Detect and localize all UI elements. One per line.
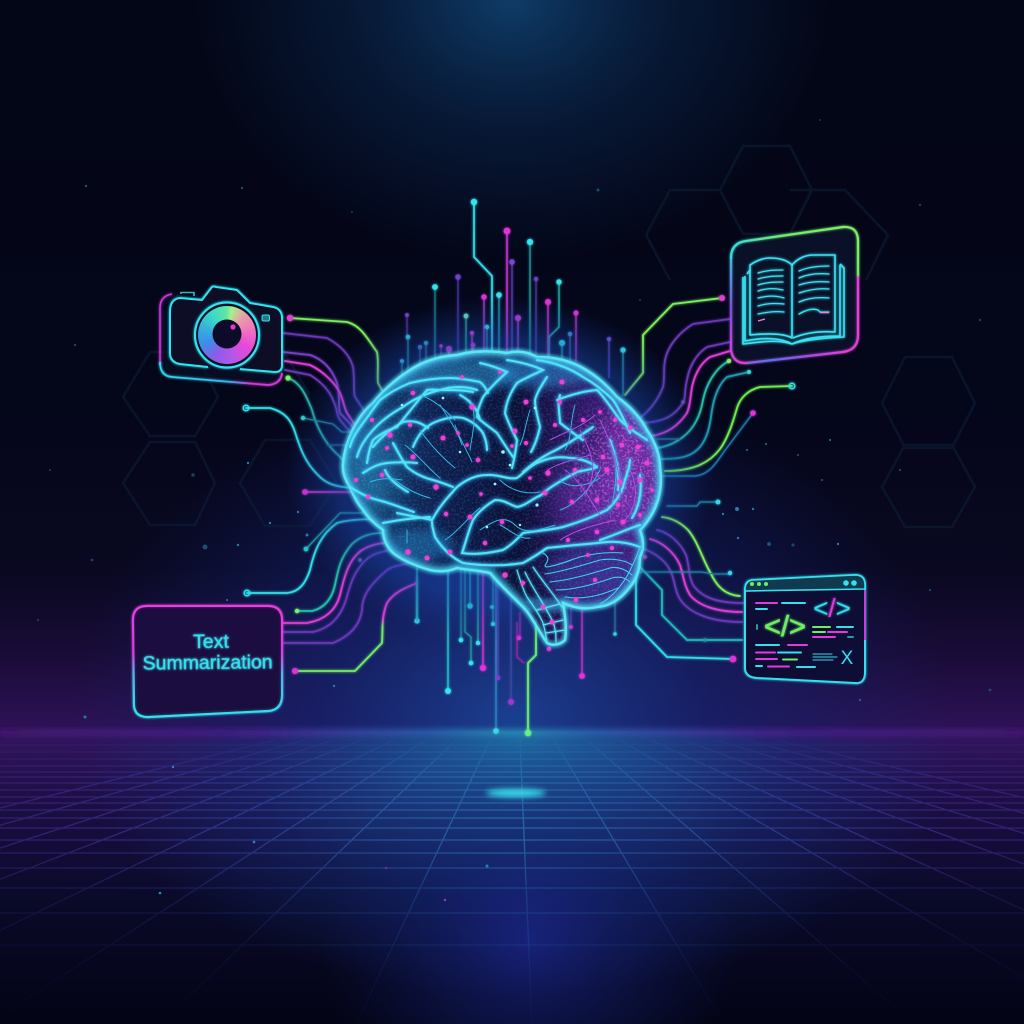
camera body outline xyxy=(170,286,282,372)
book page text lines xyxy=(758,266,829,314)
trace end nodes above the brain xyxy=(400,199,626,363)
trace end nodes below the brain xyxy=(414,603,617,736)
camera flash xyxy=(262,315,270,321)
brain halo xyxy=(285,295,715,645)
brain neuron dots xyxy=(354,370,654,624)
camera connection nodes xyxy=(243,315,308,495)
open book drawing xyxy=(743,255,844,344)
brain colour haze and speckle xyxy=(340,350,670,650)
code tag green: </> xyxy=(764,611,806,643)
book pink accent lines xyxy=(758,312,829,321)
central glowing brain xyxy=(285,295,715,650)
camera back shell xyxy=(160,294,282,386)
background star particles xyxy=(37,119,991,746)
background hexagon pattern xyxy=(123,146,975,527)
cerebellum folds xyxy=(543,547,640,604)
brain folds: fine cyan and purple traces xyxy=(370,395,635,543)
camera top button xyxy=(181,292,194,296)
brain outline xyxy=(343,351,661,645)
camera shell bottom edge xyxy=(160,362,282,385)
brain cyan sparks xyxy=(401,397,539,528)
book card borders xyxy=(731,227,858,363)
floor: perspective grid with horizon xyxy=(0,729,1024,1024)
card label: Summarization xyxy=(142,651,273,675)
window right accent xyxy=(864,590,866,640)
camera lens highlight xyxy=(230,324,236,330)
panel: camera icon xyxy=(160,286,282,386)
camera rainbow iris xyxy=(198,306,256,364)
code line bars xyxy=(756,603,853,667)
panel: text summarization xyxy=(133,606,282,717)
camera pupil xyxy=(212,320,242,348)
code close glyph: X xyxy=(841,648,854,669)
code tag cyan: </> xyxy=(813,593,851,623)
background: dark space gradient xyxy=(0,0,1024,731)
connections: book to brain xyxy=(625,298,792,476)
brain folds: soft blue wash under the gyri xyxy=(350,360,647,565)
connections: text summarization to brain xyxy=(247,513,417,671)
card label: Text xyxy=(193,631,229,653)
panel: code window xyxy=(745,575,865,683)
camera shell left edge xyxy=(160,294,172,365)
window control dots xyxy=(750,580,857,586)
card frame xyxy=(133,606,282,717)
connections: camera to brain xyxy=(246,318,383,492)
window title bar xyxy=(745,575,865,591)
camera lens ring xyxy=(195,302,259,368)
vertical circuit traces below the brain xyxy=(417,565,615,733)
text summarization connection nodes xyxy=(244,547,362,674)
brain body xyxy=(343,351,661,645)
brain folds: bright main gyri xyxy=(350,360,647,565)
vertical circuit traces above the brain xyxy=(402,202,623,396)
brain stem xyxy=(517,567,565,642)
window body xyxy=(745,575,865,683)
book connection nodes xyxy=(681,295,795,416)
panel: book icon xyxy=(731,227,858,363)
code connection nodes xyxy=(643,500,736,662)
book card background xyxy=(731,227,858,363)
connections: code window to brain xyxy=(633,502,743,659)
